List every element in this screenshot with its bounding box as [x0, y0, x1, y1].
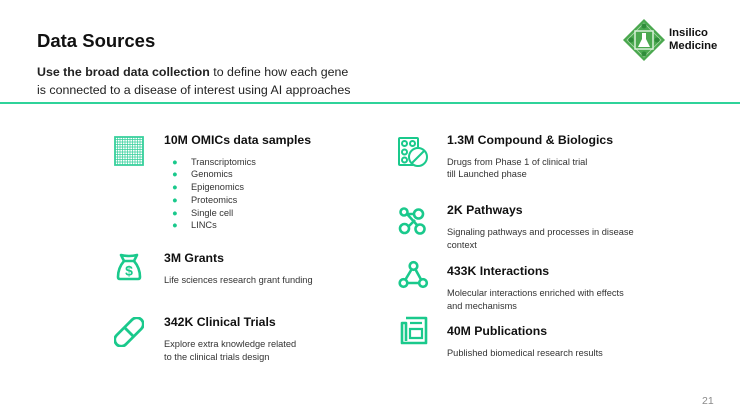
- bullet list: ●: [172, 208, 178, 218]
- bullet list: ●: [172, 169, 178, 179]
- page number: 21: [702, 395, 714, 407]
- icon: newspaper: [400, 316, 428, 344]
- description: to the clinical trials design: [164, 352, 269, 362]
- icon: triangle nodes: [398, 260, 428, 288]
- item: Pathways: [398, 203, 634, 250]
- description: [447, 227, 634, 250]
- logo: Insilico Medicine: Medicine: [669, 40, 717, 52]
- description: Life sciences research grant funding: [164, 275, 313, 285]
- icon: grid: [114, 136, 144, 166]
- icon: pill pack: [398, 137, 428, 167]
- bullet list: Transcriptomics: [191, 156, 256, 166]
- subtitle: Use the broad data collection to define how each gene: [37, 65, 348, 79]
- description: Explore extra knowledge related: [164, 339, 296, 349]
- icon: money bag: $: [125, 262, 133, 278]
- description: Molecular interactions enriched with effects: [447, 288, 624, 298]
- heading: 433K Interactions: [447, 264, 549, 278]
- subtitle: [37, 65, 350, 96]
- subtitle: is connected to a disease of interest using AI approaches: [37, 82, 350, 96]
- bullet list: ●: [172, 195, 178, 205]
- description: Signaling pathways and processes in disease: [447, 227, 634, 237]
- item: Clinical Trials: [114, 315, 296, 362]
- item: OMICs: [114, 133, 311, 230]
- description: [447, 156, 587, 179]
- heading: 342K Clinical Trials: [164, 315, 276, 329]
- item: Interactions: [398, 260, 624, 311]
- bullet list: ●: [172, 182, 178, 192]
- bullet list: ●: [172, 220, 178, 230]
- bullet list: ●: [172, 156, 178, 166]
- bullet list: Epigenomics: [191, 182, 244, 192]
- icon: capsule: [114, 317, 144, 347]
- item: Compound & Biologics: [398, 133, 613, 179]
- item: Grants: [116, 251, 313, 285]
- icon: money bag: [116, 254, 142, 280]
- logo: Insilico Medicine: [623, 19, 717, 61]
- bullet list: LINCs: [191, 220, 217, 230]
- heading: 3M Grants: [164, 251, 224, 265]
- item: Publications: [400, 316, 603, 358]
- description: Published biomedical research results: [447, 348, 603, 358]
- logo: Insilico Medicine: Insilico: [669, 27, 708, 39]
- description: till Launched phase: [447, 169, 527, 179]
- icon: pathway nodes: [398, 207, 426, 235]
- description: [447, 288, 624, 311]
- bullet list: [172, 156, 256, 230]
- bullet list: Proteomics: [191, 195, 237, 205]
- description: Drugs from Phase 1 of clinical trial: [447, 156, 587, 166]
- bullet list: Single cell: [191, 208, 233, 218]
- description: and mechanisms: [447, 301, 517, 311]
- bullet list: Genomics: [191, 169, 233, 179]
- description: [164, 339, 296, 362]
- heading: 2K Pathways: [447, 203, 523, 217]
- header divider: [0, 102, 740, 104]
- heading: 10M OMICs data samples: [164, 133, 311, 147]
- heading: 1.3M Compound & Biologics: [447, 133, 613, 147]
- heading: 40M Publications: [447, 324, 547, 338]
- title: Data Sources: [37, 30, 155, 51]
- description: context: [447, 240, 477, 250]
